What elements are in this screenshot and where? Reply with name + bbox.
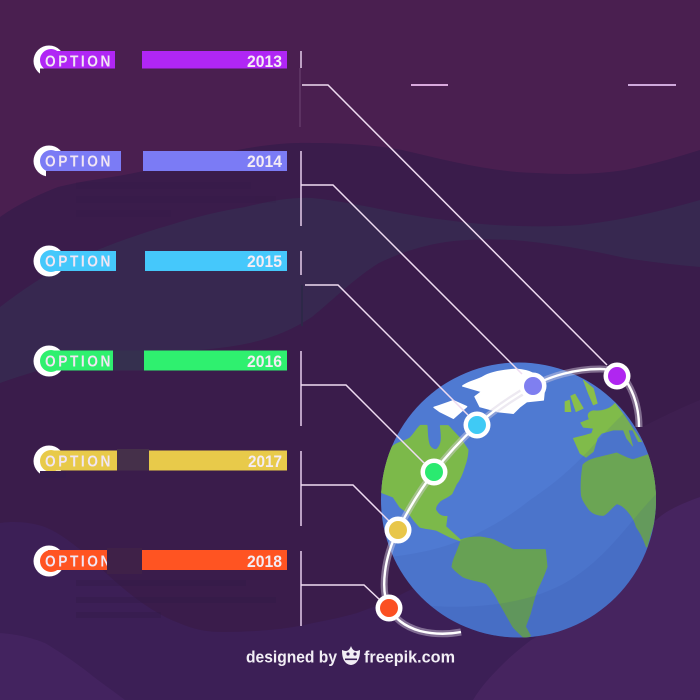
node 2013 (604, 362, 630, 390)
option label 2018: OPTION (45, 554, 113, 570)
title dashes (411, 84, 676, 86)
badge 2014 (34, 146, 64, 176)
option label 2013: OPTION (45, 54, 113, 70)
globe (381, 362, 656, 638)
option row 2018 (34, 546, 287, 576)
bar 2014 (48, 151, 287, 171)
year 2018: 2018 (247, 553, 282, 571)
footer credit: freepik.com (364, 648, 455, 666)
vertical dividers (300, 51, 302, 626)
year 2015: 2015 (247, 253, 282, 271)
badge cut-out 2013 (40, 68, 70, 76)
node 2017 (384, 516, 412, 544)
badge 2013 (34, 46, 64, 76)
year 2016: 2016 (247, 353, 282, 371)
bar 2015 (48, 251, 287, 271)
globe shading (452, 414, 656, 638)
node 2018 (376, 594, 402, 622)
icon: south america (452, 537, 547, 638)
icon: north america (380, 426, 468, 541)
icon: scandinavia and british isles (565, 380, 597, 412)
year 2014: 2014 (247, 153, 283, 171)
badge cut-out 2014 (46, 171, 70, 180)
option row 2013 (34, 46, 287, 76)
node 2015 (464, 412, 490, 438)
footer credit: designed by (246, 648, 338, 666)
option label 2016: OPTION (45, 354, 113, 370)
badge 2015 (34, 246, 64, 276)
option label 2014: OPTION (45, 154, 113, 170)
bar 2016 (48, 350, 287, 370)
orbit path (384, 369, 639, 634)
bar 2018 (48, 550, 287, 570)
option row 2016 (34, 346, 287, 376)
icon: africa (581, 453, 657, 547)
year 2017: 2017 (248, 453, 282, 471)
option row 2014 (34, 146, 287, 180)
europe and northern islands (565, 380, 642, 457)
bar 2013 (48, 51, 287, 68)
option label 2015: OPTION (45, 254, 113, 270)
background waves (0, 143, 700, 700)
bar gap 2018 (107, 548, 142, 574)
badge 2017 (34, 446, 64, 476)
node 2014 (520, 372, 546, 400)
option row 2015 (34, 246, 287, 276)
badge cut-out 2017 (40, 471, 66, 478)
badge 2018 (34, 546, 64, 576)
icon: europe (573, 403, 642, 457)
year 2013: 2013 (247, 53, 282, 71)
icon: freepik mascot (342, 646, 360, 665)
icon: greenland and arctic ice (434, 369, 545, 418)
option label 2017: OPTION (45, 454, 113, 470)
footer credit (246, 646, 455, 666)
badge 2016 (34, 346, 64, 376)
connector lines (301, 85, 607, 600)
option row 2017 (34, 446, 287, 478)
node 2016 (420, 458, 448, 486)
faint description smudges (76, 182, 276, 618)
bar 2017 (48, 449, 287, 470)
